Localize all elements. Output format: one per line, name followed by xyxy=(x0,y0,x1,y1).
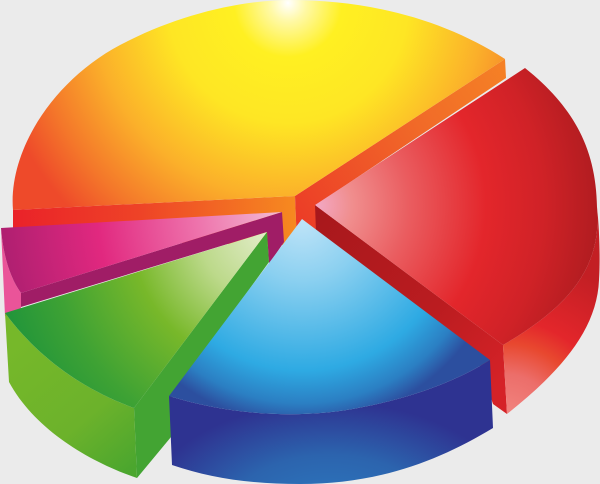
blue slice top xyxy=(169,219,490,414)
yellow slice xyxy=(13,0,506,245)
yellow slice front wall xyxy=(13,196,297,245)
green slice top xyxy=(5,232,267,408)
red slice inner wall xyxy=(315,205,507,414)
green slice side wall xyxy=(134,232,269,478)
green slice xyxy=(5,232,269,478)
blue slice outer wall xyxy=(169,360,493,484)
pink slice outer wall xyxy=(1,228,21,316)
pink slice xyxy=(1,212,284,316)
yellow slice right wall xyxy=(295,59,506,245)
red slice outer wall xyxy=(503,207,600,414)
blue slice xyxy=(169,219,493,484)
red slice xyxy=(315,68,600,414)
red slice top xyxy=(315,68,598,345)
pink slice top xyxy=(1,212,282,293)
green slice outer wall xyxy=(5,313,137,478)
pink slice inner wall xyxy=(21,212,284,307)
yellow slice top xyxy=(13,0,505,210)
